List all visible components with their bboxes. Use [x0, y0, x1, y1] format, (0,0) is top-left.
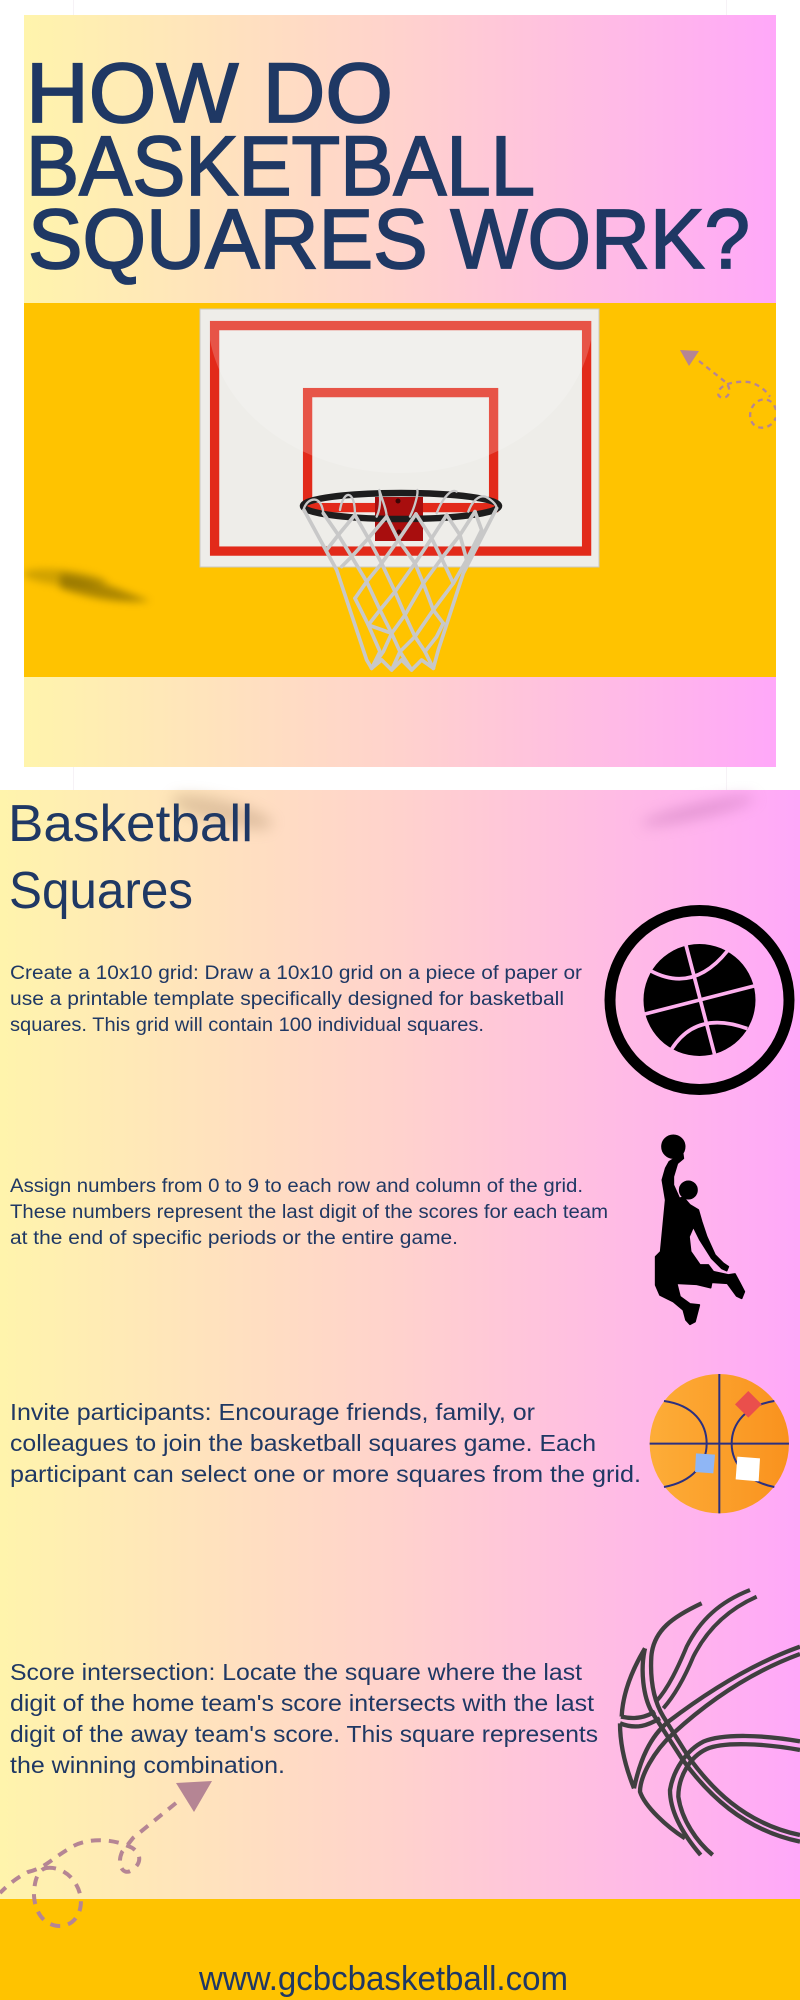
- icon: player dunking silhouette: [656, 1135, 744, 1324]
- title: HOW DO: [26, 46, 393, 140]
- text block: score intersection: Score intersection: Locate the square where the last: [10, 1659, 583, 1685]
- text block: score intersection: digit of the home team's score intersects with the last: [10, 1690, 595, 1716]
- text block: create grid: [10, 963, 583, 1036]
- text block: invite participants: [10, 1399, 641, 1487]
- footer url: www.gcbcbasketball.com: [198, 1960, 568, 1998]
- text block: create grid: squares. This grid will contain 100 individual squares.: [10, 1015, 484, 1036]
- panel: lower gradient section: [0, 790, 800, 1900]
- title: BASKETBALL: [26, 119, 535, 213]
- icon: dashed play arrow bottom left: [0, 1781, 212, 1926]
- text block: invite participants: colleagues to join the basketball squares game. Each: [10, 1430, 596, 1456]
- text block: assign numbers: Assign numbers from 0 to 9 to each row and column of the grid.: [10, 1176, 583, 1197]
- heading: Basketball Squares: [8, 795, 253, 920]
- panel: yellow court band: [24, 303, 776, 677]
- text block: invite participants: participant can select one or more squares from the grid.: [10, 1461, 641, 1487]
- text block: invite participants: Invite participants: Encourage friends, family, or: [10, 1399, 535, 1425]
- shadow smudge: court band: [22, 566, 150, 602]
- text block: assign numbers: These numbers represent the last digit of the scores for each team: [10, 1202, 608, 1223]
- net: [304, 490, 497, 670]
- panel: top hero gradient: [24, 15, 776, 767]
- text block: assign numbers: at the end of specific periods or the entire game.: [10, 1228, 458, 1249]
- heading: Basketball Squares: Basketball: [8, 795, 253, 853]
- text block: create grid: use a printable template specifically designed for basketball: [10, 989, 564, 1010]
- text block: score intersection: the winning combination.: [10, 1752, 285, 1778]
- backboard: [200, 309, 599, 567]
- heading: Basketball Squares: Squares: [9, 862, 193, 920]
- icon: orange ball with squares: [650, 1374, 789, 1513]
- panel: footer bar: [0, 1899, 800, 2000]
- text block: score intersection: digit of the away team's score. This square represents: [10, 1721, 598, 1747]
- icon: basketball backboard and hoop: [200, 309, 599, 670]
- shadow smudge: tan: [169, 788, 275, 836]
- title: SQUARES WORK?: [28, 192, 750, 286]
- text block: create grid: Create a 10x10 grid: Draw a 10x10 grid on a piece of paper or: [10, 963, 583, 984]
- icon: dashed play arrow top right: [680, 350, 776, 428]
- hoop rim: [303, 493, 499, 519]
- text block: score intersection: [10, 1659, 598, 1778]
- icon: basketball in ring: [610, 910, 789, 1090]
- text block: assign numbers: [10, 1176, 608, 1249]
- shadow smudge: purple: [640, 791, 756, 831]
- icon: basketball outline: [620, 1590, 800, 1855]
- title: [26, 46, 750, 286]
